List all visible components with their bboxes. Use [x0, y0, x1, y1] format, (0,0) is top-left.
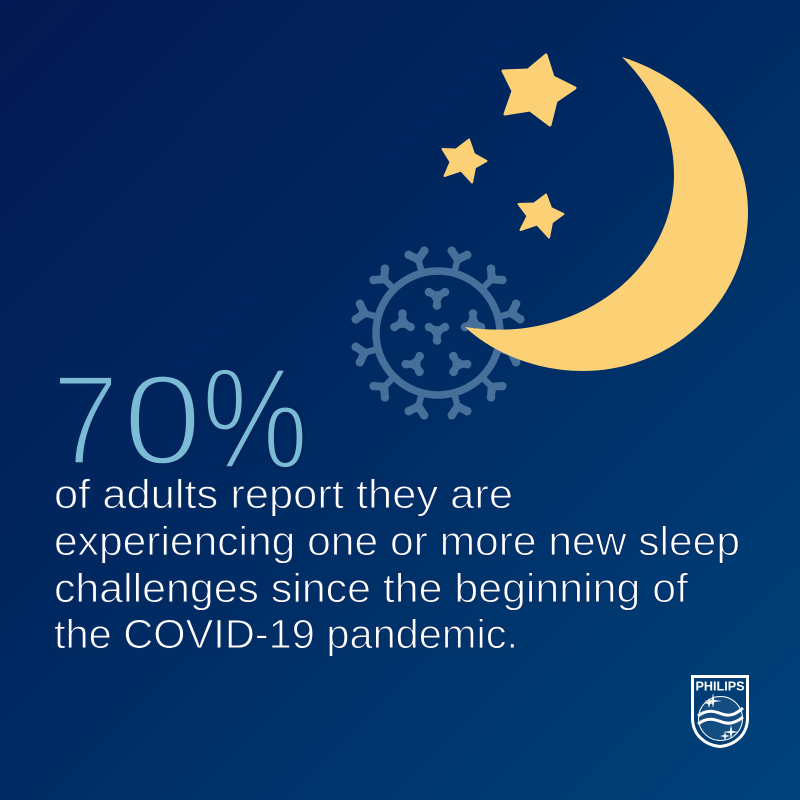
logo: Philips shield: PHILIPS [696, 680, 744, 694]
big statistic: 70%: % [202, 338, 308, 499]
big statistic: 70%: 7 [52, 349, 119, 492]
logo: Philips shield [692, 676, 748, 746]
body text: the COVID-19 pandemic. [54, 611, 518, 657]
big statistic: 70% [52, 338, 308, 499]
body text: challenges since the beginning of [54, 565, 689, 611]
body text [54, 471, 740, 657]
icon: large star [503, 55, 575, 125]
icon: virus [350, 245, 526, 421]
body text: experiencing one or more new sleep [54, 518, 740, 564]
body text: of adults report they are [54, 471, 513, 517]
big statistic: 70%: 0 [123, 349, 202, 492]
icon: small star right [518, 194, 564, 238]
icon: small star left [442, 140, 486, 182]
icon: crescent moon [465, 57, 748, 371]
